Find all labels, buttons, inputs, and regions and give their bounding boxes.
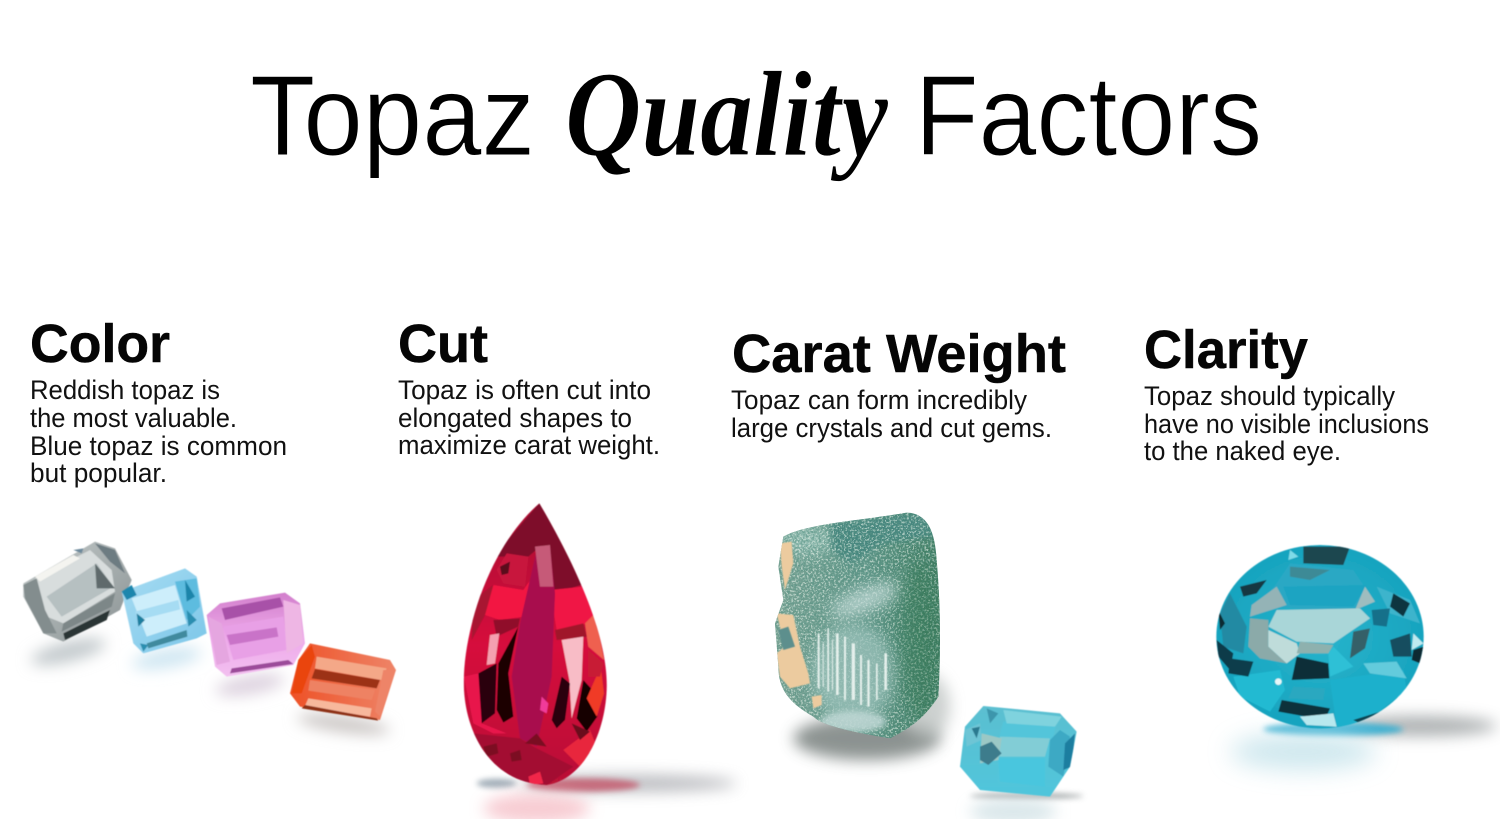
icon: oval gem (1213, 543, 1427, 730)
title: Topaz (250, 53, 535, 180)
icon: rough topaz crystal (770, 510, 943, 743)
text: cut description (398, 375, 660, 460)
text: clarity description (1144, 381, 1429, 466)
image: four coloured emerald-cut topazes (23, 542, 396, 738)
text: color description: Blue topaz is common (30, 431, 287, 461)
heading: color: Color (30, 314, 170, 374)
text: carat weight description (731, 385, 1052, 443)
icon: pear gem shadow and reflection (477, 775, 737, 819)
panel: cut (398, 314, 737, 819)
icon: orange-red topaz (290, 643, 396, 721)
heading: carat weight: Carat Weight (732, 324, 1066, 384)
text: carat weight description: Topaz can form incredibly (731, 385, 1027, 415)
panel: clarity (1144, 320, 1497, 770)
text: cut description: elongated shapes to (398, 403, 632, 433)
icon: pink topaz (207, 593, 305, 677)
text: cut description: Topaz is often cut into (398, 375, 651, 405)
heading: cut: Cut (398, 314, 488, 374)
text: color description: the most valuable. (30, 403, 237, 433)
text: carat weight description: large crystals and cut gems. (731, 413, 1052, 443)
icon: pear gem (457, 500, 613, 790)
title: Factors (915, 53, 1262, 180)
heading: clarity: Clarity (1144, 320, 1308, 380)
text: clarity description: have no visible inclusions (1144, 409, 1429, 439)
icon: clear topaz (23, 542, 132, 642)
text: clarity description: to the naked eye. (1144, 436, 1341, 466)
icon: gem shadows (29, 633, 391, 738)
title (250, 47, 1262, 182)
icon: crystal shadow (793, 673, 1083, 819)
text: cut description: maximize carat weight. (398, 430, 660, 460)
title: Quality (565, 47, 889, 182)
image: oval blue topaz (1213, 543, 1497, 770)
panel: color (23, 314, 396, 738)
icon: oval gem shadow (1230, 716, 1497, 770)
text: color description (30, 375, 287, 488)
text: clarity description: Topaz should typically (1144, 381, 1395, 411)
image: red pear-cut topaz (457, 500, 737, 819)
icon: sky blue topaz (122, 568, 207, 653)
panel: carat weight (731, 324, 1083, 819)
icon: cut aqua gem (957, 703, 1080, 800)
text: color description: but popular. (30, 458, 167, 488)
text: color description: Reddish topaz is (30, 375, 220, 405)
image: rough crystal and cut aqua gem (770, 510, 1083, 819)
